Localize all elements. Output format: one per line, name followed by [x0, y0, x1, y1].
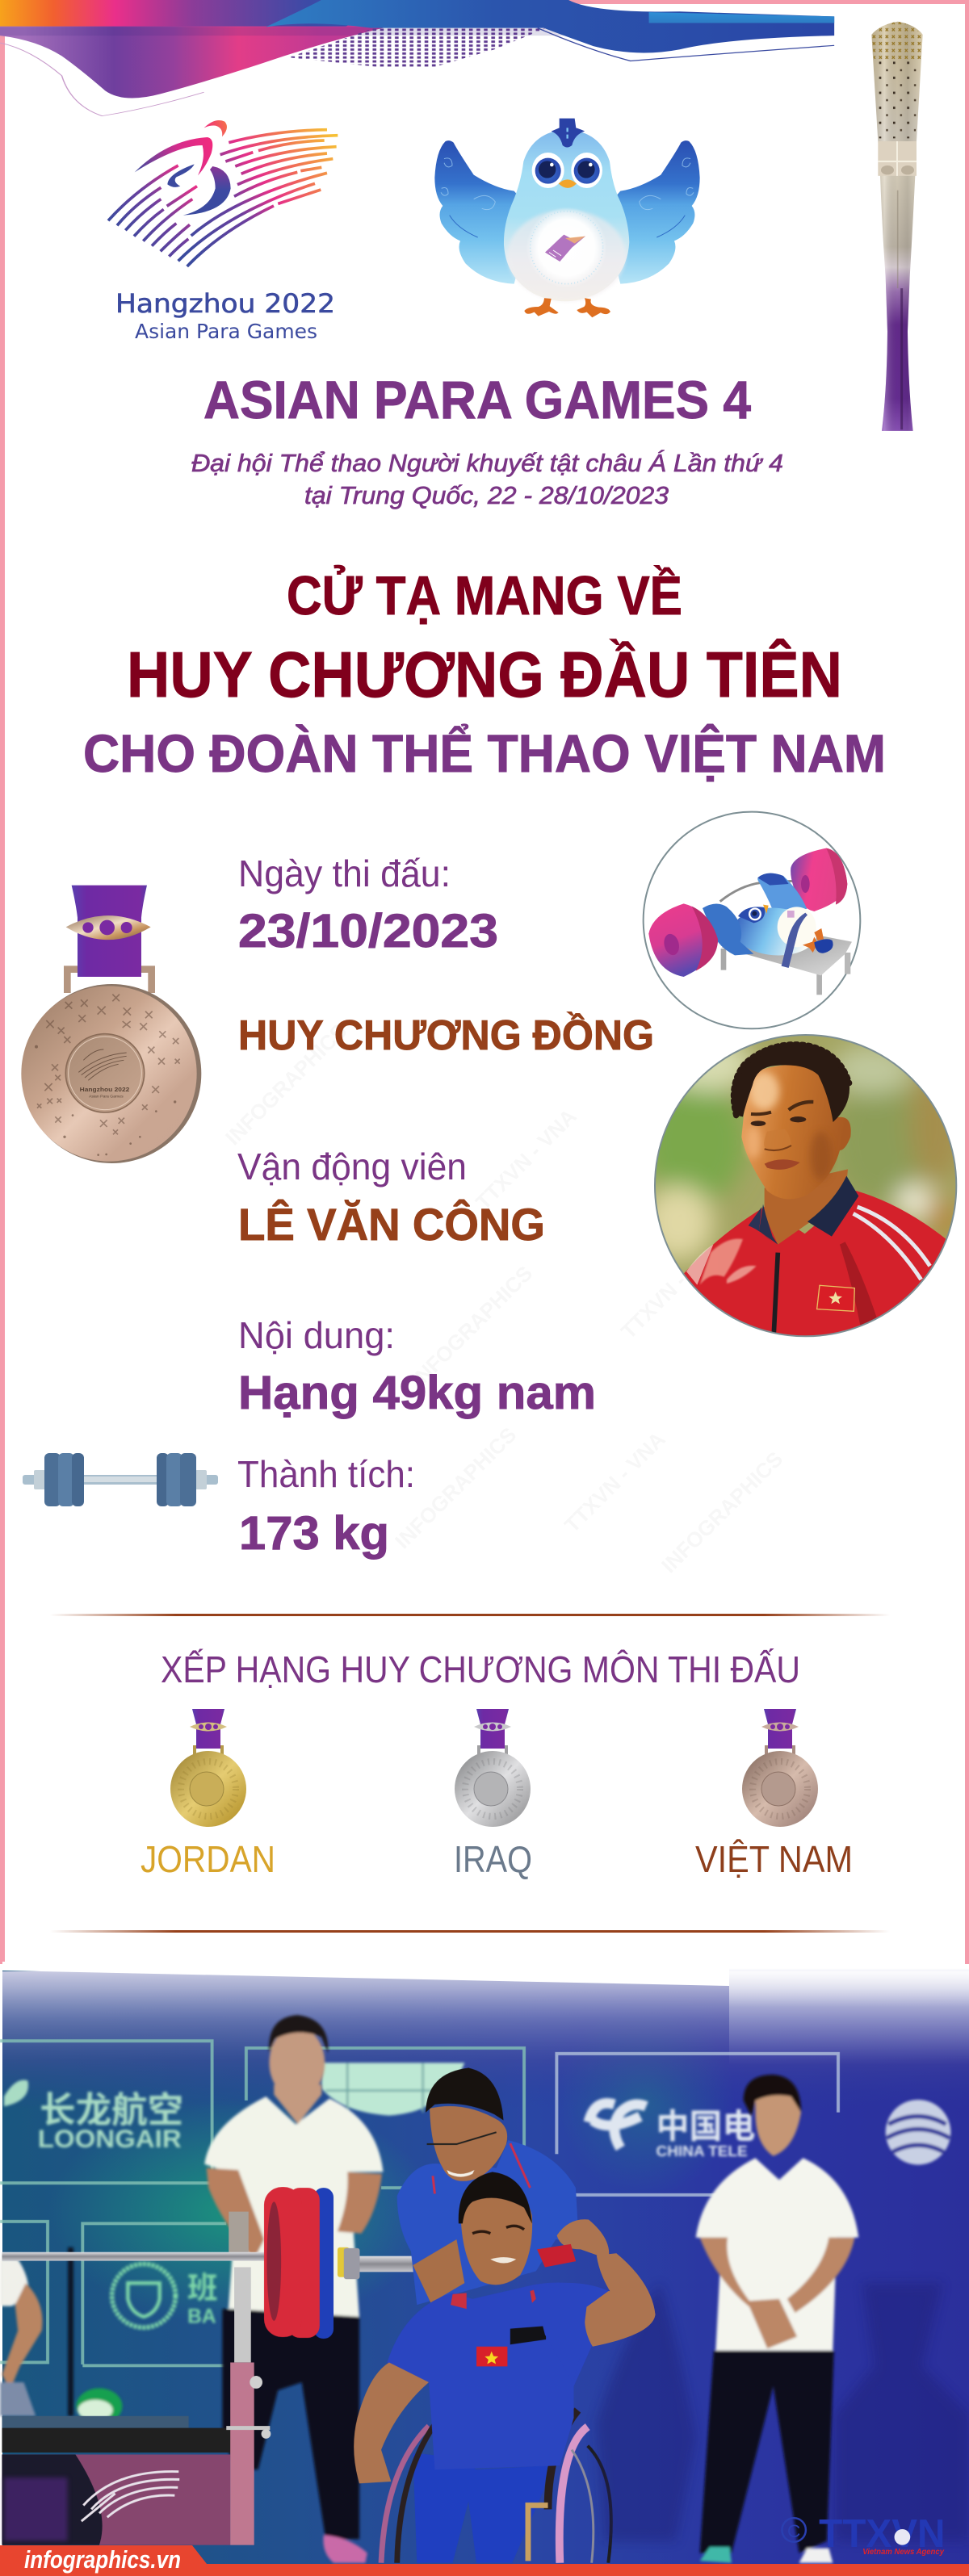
mascot beak: [559, 179, 577, 188]
portrait neck and collar: [749, 1169, 858, 1245]
label: Việt Nam: VIỆT NAM: [695, 1838, 853, 1880]
mascot feet: [524, 298, 610, 317]
medal ribbon: [72, 886, 147, 977]
lifting bird: [703, 873, 833, 968]
logo text: Asian Para Games: Asian Para Games: [135, 320, 317, 343]
sponsor logos: 班: [187, 2264, 217, 2307]
coach in blue polo: [397, 2068, 579, 2305]
logo mark: runner with speed arcs: [108, 120, 338, 266]
info block: ngày thi đấu: 23/10/2023: [238, 905, 498, 957]
main title: CỬ TẠ MANG VỀ: [287, 564, 682, 626]
circle: mascot lifting barbell: [644, 812, 860, 1028]
flag on shirt: [476, 2347, 507, 2366]
heading: medal ranking: XẾP HẠNG HUY CHƯƠNG MÔN THI ĐẤU: [161, 1648, 800, 1690]
logo text: Hangzhou 2022: Hangzhou 2022: [115, 288, 335, 319]
info block: vận động viên: LÊ VĂN CÔNG: [238, 1199, 545, 1250]
faint watermarks: INFOGRAPHICS: [656, 1447, 787, 1577]
info block: thành tích: Thành tích:: [237, 1453, 415, 1495]
footer bar: [0, 2545, 969, 2576]
page frame: pink border: [0, 0, 969, 1964]
portrait features: [751, 1102, 813, 1170]
sponsor logos: BA: [187, 2306, 216, 2327]
sponsor panels: [0, 2041, 969, 2365]
subtitle: [191, 449, 783, 509]
info block: nội dung: Hạng 49kg nam: [238, 1367, 596, 1419]
info block: ngày thi đấu: Ngày thi đấu:: [238, 852, 451, 894]
faint watermarks: TTXVN - VNA: [471, 1104, 581, 1214]
mascot eyes: [532, 153, 602, 188]
portrait flag badge: [817, 1285, 854, 1311]
medal disc: [21, 984, 201, 1163]
athlete in blue shirt: [354, 2172, 610, 2483]
main title: HUY CHƯƠNG ĐẦU TIÊN: [127, 639, 842, 710]
wall shadows: [597, 2283, 969, 2541]
faint watermarks: INFOGRAPHICS: [406, 1261, 537, 1392]
left person: [0, 2247, 122, 2424]
medal disc: Asian Para Games: [89, 1094, 124, 1099]
athlete's lower body: [413, 2454, 548, 2563]
medal: Jordan gold: [170, 1709, 246, 1827]
photo background: [2, 1962, 969, 2576]
photo: athlete on stage: [0, 1962, 969, 2576]
TTXVN logo: TTXVN: [819, 2511, 945, 2556]
man in white polo, right: [696, 2075, 858, 2563]
medal buckle: [66, 915, 151, 940]
label: Iraq: IRAQ: [454, 1838, 532, 1880]
mascot body: [504, 129, 629, 301]
info block: huy chương đồng: HUY CHƯƠNG ĐỒNG: [238, 1012, 654, 1059]
China Telecom and China Mobile logos: [589, 2100, 950, 2165]
sponsor logos: LOONGAIR: [38, 2125, 182, 2153]
bench: [721, 934, 852, 995]
faint watermarks: INFOGRAPHICS: [390, 1422, 521, 1553]
portrait: Lê Văn Công: [654, 1034, 958, 1337]
portrait hair: [733, 1045, 849, 1122]
logo: Hangzhou 2022 Asian Para Games: [108, 120, 338, 343]
TTXVN logo: C: [787, 2521, 800, 2541]
bar: [720, 881, 805, 902]
faint watermarks: TTXVN - VNA: [616, 1233, 727, 1343]
TTXVN logo: Vietnam News Agency: [862, 2548, 945, 2557]
torch: [871, 22, 923, 431]
medal: Iraq silver: [455, 1709, 531, 1827]
left weight: [648, 903, 718, 977]
sponsor logos: [4, 2063, 464, 2327]
medal disc: Hangzhou 2022: [80, 1086, 129, 1093]
China Telecom and China Mobile logos: CHINA TELE: [656, 2142, 748, 2159]
info block: nội dung: [238, 1314, 596, 1419]
medal loop: [67, 970, 152, 993]
bench and stand: [2, 2212, 271, 2545]
right weight: [791, 848, 847, 911]
China Telecom and China Mobile logos: 中国电: [656, 2100, 755, 2149]
subtitle: Đại hội Thể thao Người khuyết tật châu Á Lần thứ 4: [191, 449, 783, 477]
faint watermarks: TTXVN - VNA: [560, 1426, 670, 1537]
sponsor logos: 长龙航空: [40, 2081, 183, 2133]
info block: vận động viên: [237, 1146, 545, 1250]
info block: ngày thi đấu: [238, 852, 498, 957]
athlete's raised arm: [533, 2219, 656, 2382]
man in white polo, left: [204, 2015, 383, 2563]
barbell with plates: [2, 2187, 415, 2339]
label: Jordan: JORDAN: [141, 1838, 275, 1880]
faint watermarks: INFOGRAPHICS: [220, 1019, 351, 1150]
medal: Việt Nam bronze: [742, 1709, 818, 1827]
wheelchair: [381, 2410, 611, 2563]
main title: CHO ĐOÀN THỂ THAO VIỆT NAM: [83, 723, 886, 783]
info block: nội dung: Nội dung:: [238, 1314, 395, 1356]
mascot wings: [434, 140, 700, 284]
faint watermarks: [220, 1019, 787, 1577]
footer source: infographics.vn: infographics.vn: [24, 2545, 181, 2574]
portrait jacket: [684, 1191, 946, 1335]
header wave decoration: [0, 0, 834, 116]
main title: [83, 564, 886, 783]
mascot crest: [552, 119, 585, 147]
info block: thành tích: 173 kg: [239, 1507, 389, 1560]
portrait face: [741, 1065, 851, 1199]
portrait background: [656, 1036, 956, 1274]
heading: Asian Para Games 4: ASIAN PARA GAMES 4: [203, 370, 751, 429]
icon: barbell: [23, 1453, 218, 1506]
info block: thành tích: [237, 1453, 415, 1560]
info block: vận động viên: Vận động viên: [237, 1146, 467, 1187]
subtitle: tại Trung Quốc, 22 - 28/10/2023: [304, 481, 669, 509]
mascot: blue bird: [434, 119, 700, 317]
mascot belly glow: [507, 207, 626, 301]
large bronze medal: [21, 886, 201, 1163]
